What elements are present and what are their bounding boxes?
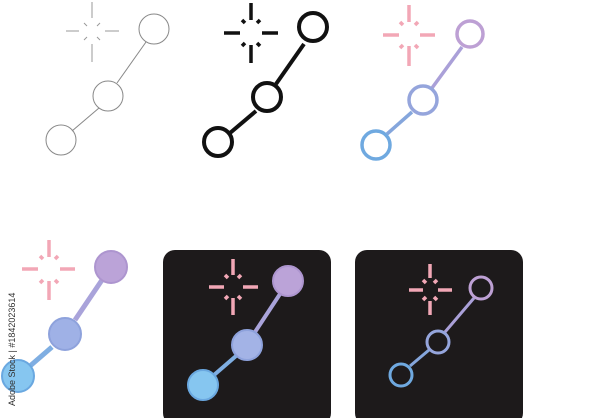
sparkle	[409, 264, 452, 315]
icon: gradient outline	[362, 5, 483, 159]
panel: dark outline	[355, 250, 523, 418]
icon: bold outline	[204, 3, 327, 156]
sparkle bold	[224, 3, 278, 63]
watermark text: Adobe Stock | #1842023614	[7, 293, 17, 406]
sparkle thin	[66, 2, 119, 62]
icon: filled gradient	[2, 240, 127, 392]
icon: thin outline	[46, 2, 169, 155]
panel: dark filled	[163, 250, 331, 418]
sparkle pink filled	[22, 240, 75, 300]
sparkle	[209, 259, 258, 315]
sparkle pink	[383, 5, 435, 66]
